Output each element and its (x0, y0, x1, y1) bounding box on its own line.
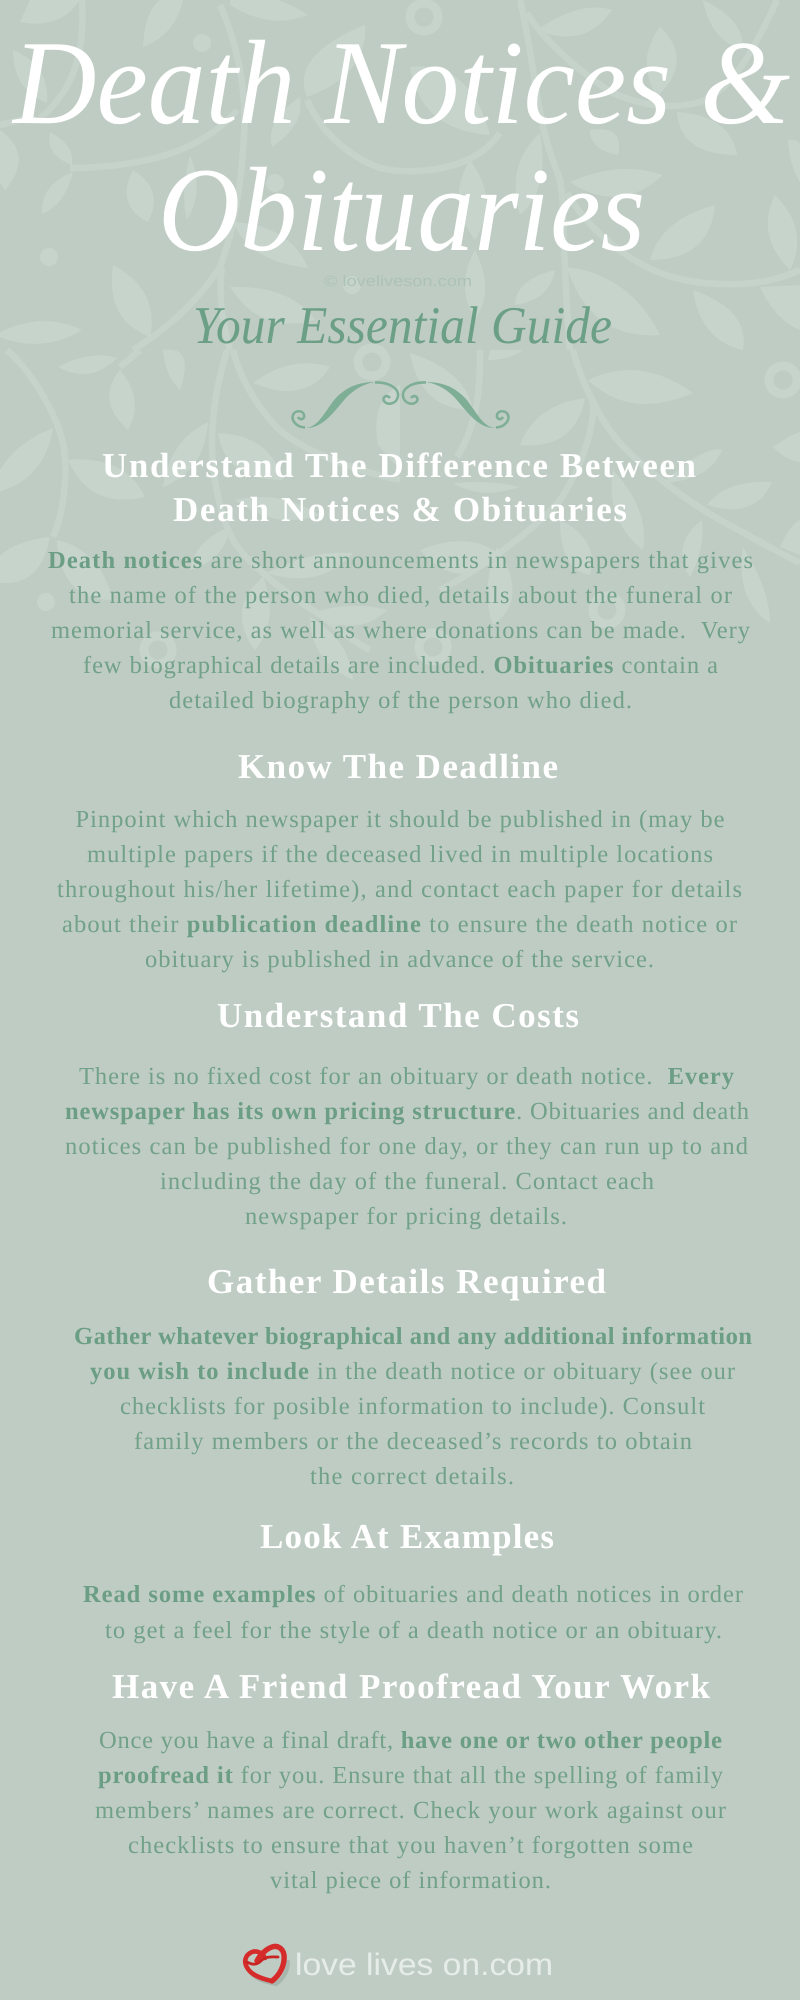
text block: you wish to include in the death notice or obituary (see our (90, 1358, 735, 1385)
icon: ribbon heart (245, 1946, 288, 1984)
heading: Have A Friend Proofread Your Work (112, 1667, 711, 1706)
text block (83, 1581, 743, 1644)
heading: Look At Examples (260, 1517, 554, 1556)
text block: including the day of the funeral. Contact each (160, 1168, 654, 1195)
section: details (74, 1262, 752, 1490)
text block (57, 806, 742, 973)
text block: detailed biography of the person who died. (169, 687, 632, 714)
heading (102, 446, 696, 529)
text block: to get a feel for the style of a death notice or an obituary. (105, 1617, 722, 1644)
text block: proofread it for you. Ensure that all the spelling of family (98, 1762, 724, 1789)
text block: notices can be published for one day, or they can run up to and (65, 1133, 748, 1160)
title: Death Notices & (11, 16, 790, 149)
wordmark: love lives on.com (295, 1947, 553, 1982)
text block: memorial service, as well as where donations can be made. Very (51, 617, 751, 644)
text block: about their publication deadline to ensure the death notice or (62, 911, 737, 938)
text block: the name of the person who died, details about the funeral or (69, 582, 732, 609)
text block: the correct details. (310, 1463, 514, 1490)
heading: Understand The Costs (217, 996, 579, 1035)
title: Obituaries (158, 143, 645, 276)
text block (48, 547, 753, 714)
text block: Once you have a final draft, have one or two other people (99, 1727, 722, 1754)
logo (245, 1946, 553, 1984)
text block: obituary is published in advance of the service. (145, 946, 654, 973)
text block: checklists for posible information to include). Consult (120, 1393, 705, 1420)
copyright: © loveliveson.com (324, 273, 472, 290)
text block (65, 1063, 749, 1230)
text block: Gather whatever biographical and any additional information (74, 1323, 752, 1350)
text block: checklists to ensure that you haven’t forgotten some (128, 1832, 693, 1859)
heading: Understand The Difference Between (102, 446, 696, 485)
text block: few biographical details are included. Obituaries contain a (83, 652, 718, 679)
section: proofread (95, 1667, 726, 1894)
text block (74, 1323, 752, 1490)
section: examples (83, 1517, 743, 1644)
section: costs (65, 996, 749, 1230)
icon: flourish (293, 382, 508, 428)
text block: multiple papers if the deceased lived in multiple locations (87, 841, 713, 868)
text block: vital piece of information. (270, 1867, 551, 1894)
text block: Pinpoint which newspaper it should be published in (may be (76, 806, 725, 833)
text block: members’ names are correct. Check your work against our (95, 1797, 726, 1824)
subtitle: Your Essential Guide (193, 297, 612, 355)
text block: Read some examples of obituaries and death notices in order (83, 1581, 743, 1608)
text block (95, 1727, 726, 1894)
text block: There is no fixed cost for an obituary or death notice. Every (79, 1063, 735, 1090)
text block: family members or the deceased’s records to obtain (134, 1428, 692, 1455)
title (11, 16, 790, 276)
section: deadline (57, 747, 742, 973)
heading: Gather Details Required (207, 1262, 607, 1301)
text block: Death notices are short announcements in newspapers that gives (48, 547, 753, 574)
text block: throughout his/her lifetime), and contact each paper for details (57, 876, 742, 903)
text block: newspaper for pricing details. (245, 1203, 567, 1230)
heading: Death Notices & Obituaries (173, 490, 627, 529)
text block: newspaper has its own pricing structure. Obituaries and death (65, 1098, 749, 1125)
heading: Know The Deadline (238, 747, 558, 786)
section: difference (48, 446, 753, 714)
